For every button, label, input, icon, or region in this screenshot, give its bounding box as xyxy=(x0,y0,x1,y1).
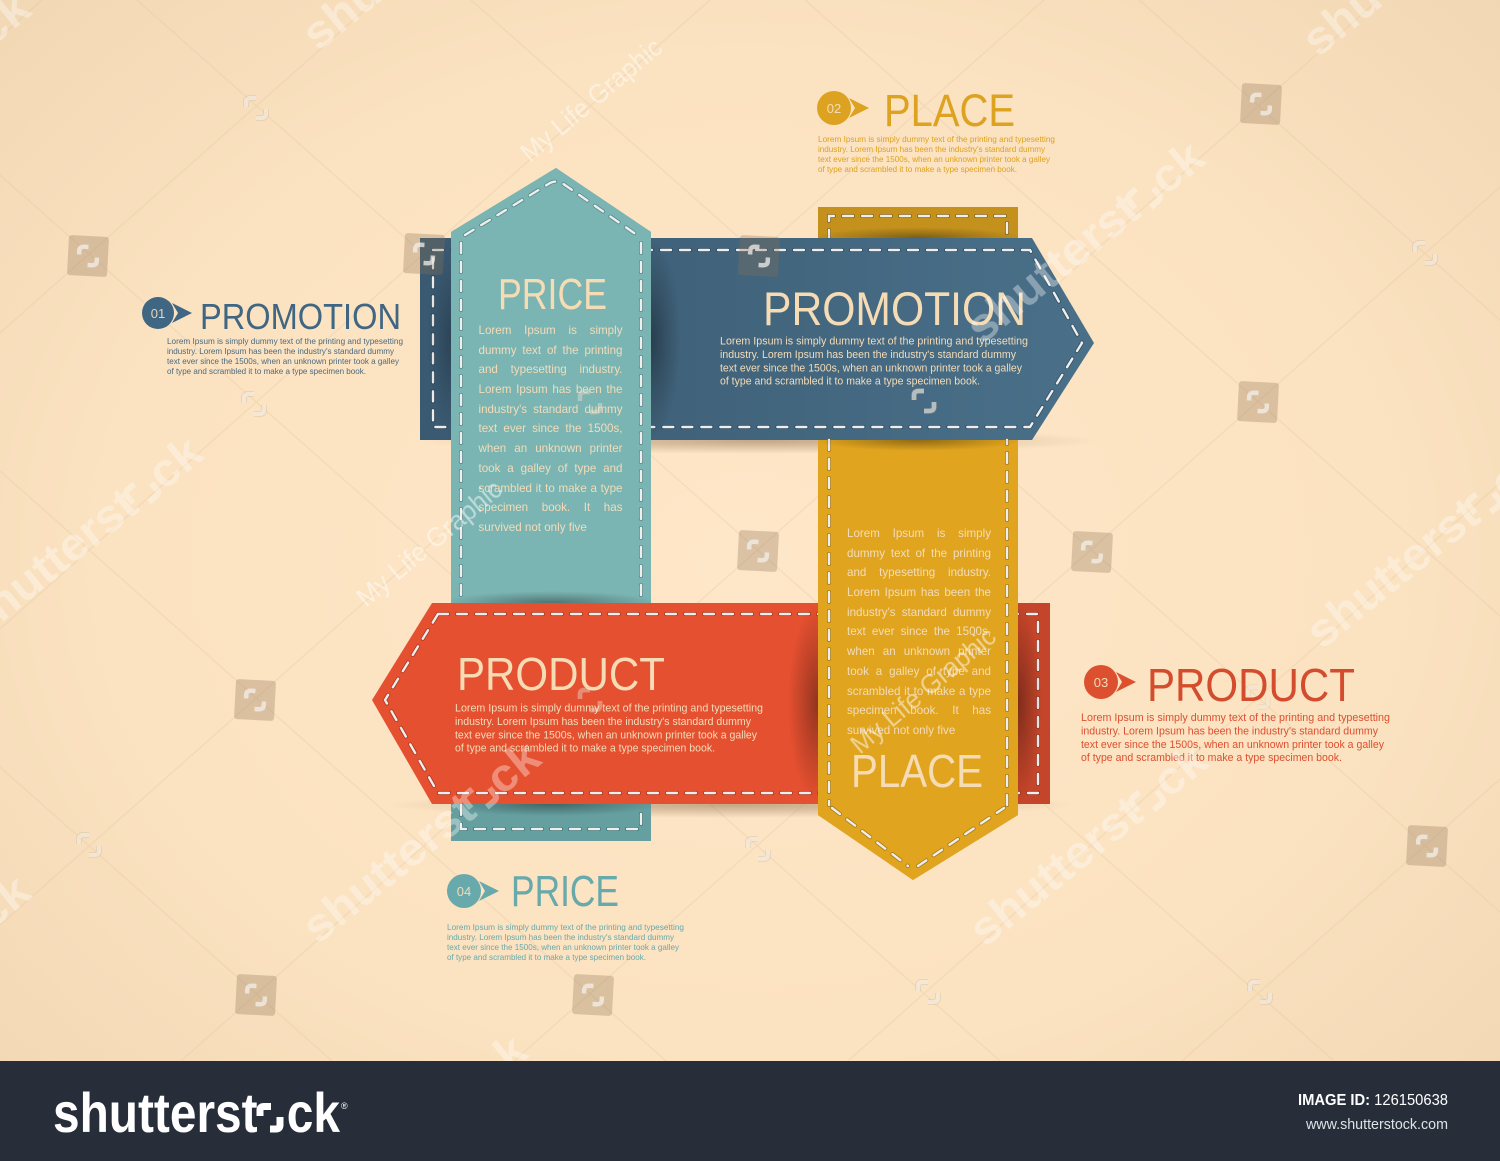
watermark: My Life Graphic text xyxy=(351,32,1002,760)
text block: legend product: industry. Lorem Ipsum has been the industry's standard dummy xyxy=(1081,726,1378,738)
heading: promotion: PROMOTION xyxy=(763,282,1026,335)
icon: badge 03 xyxy=(1084,665,1136,699)
text block: place ribbon: and typesetting industry. xyxy=(847,566,991,579)
ribbon: place, back layer xyxy=(818,207,1018,880)
watermark: My Life Graphic text: My Life Graphic xyxy=(515,32,668,168)
text block: product xyxy=(455,702,763,754)
text block: place ribbon: scrambled it to make a type xyxy=(847,684,991,698)
text block: price ribbon: survived not only five xyxy=(478,521,587,534)
text block: legend place: of type and scrambled it to make a type specimen book. xyxy=(818,164,1017,174)
text block: price ribbon xyxy=(478,324,622,534)
text block: price ribbon: when an unknown printer xyxy=(478,442,622,455)
text block: legend promotion: of type and scrambled it to make a type specimen book. xyxy=(167,366,366,376)
text block: place ribbon: dummy text of the printing xyxy=(847,547,991,560)
text block: price ribbon: took a galley of type and xyxy=(478,462,622,475)
text block: place ribbon: took a galley of type and xyxy=(847,665,991,678)
text block: legend product: of type and scrambled it to make a type specimen book. xyxy=(1081,752,1342,764)
text block: place ribbon: industry's standard dummy xyxy=(847,606,991,619)
text block: product: of type and scrambled it to make a type specimen book. xyxy=(455,742,715,754)
text block: legend promotion: industry. Lorem Ipsum has been the industry's standard dummy xyxy=(167,346,395,356)
text block: promotion xyxy=(720,336,1028,388)
text block: legend place: Lorem Ipsum is simply dummy text of the printing and typesetting xyxy=(818,134,1055,144)
legend 01: promotion xyxy=(142,296,403,376)
text block: place ribbon: survived not only five xyxy=(847,724,955,737)
text block: legend price: Lorem Ipsum is simply dummy text of the printing and typesetting xyxy=(447,922,684,932)
text block: price ribbon: specimen book. It has xyxy=(478,501,622,514)
text block: place ribbon: when an unknown printer xyxy=(847,645,991,658)
text block: product: Lorem Ipsum is simply dummy text of the printing and typesetting xyxy=(455,702,763,714)
text block: place ribbon xyxy=(847,527,991,737)
legend 03: product xyxy=(1081,659,1390,764)
text block: promotion: industry. Lorem Ipsum has been the industry's standard dummy xyxy=(720,349,1016,361)
watermark: My Life Graphic text: My Life Graphic xyxy=(351,474,508,613)
icon: badge 02: 02 xyxy=(827,101,841,116)
text block: legend product xyxy=(1081,712,1390,764)
watermark: shutterstock text: shutterstock xyxy=(956,130,1214,353)
text block: price ribbon: Lorem Ipsum is simply xyxy=(478,324,622,337)
text block: legend price: text ever since the 1500s, when an unknown printer took a galley xyxy=(447,942,680,952)
text block: promotion: of type and scrambled it to make a type specimen book. xyxy=(720,376,980,388)
ribbon: price, lower part xyxy=(441,168,661,841)
icon: badge 02 xyxy=(817,91,869,125)
heading: legend promotion: PROMOTION xyxy=(200,296,401,337)
icon: badge 04: 04 xyxy=(457,884,471,899)
heading: place: PLACE xyxy=(851,745,983,797)
text block: legend product: text ever since the 1500s, when an unknown printer took a galley xyxy=(1081,739,1384,751)
watermark: My Life Graphic text: My Life Graphic xyxy=(845,621,1002,760)
text block: product: industry. Lorem Ipsum has been the industry's standard dummy xyxy=(455,716,751,728)
watermark: square icons xyxy=(67,83,1448,1016)
text block: place ribbon: Lorem Ipsum is simply xyxy=(847,527,991,540)
text block: legend price: of type and scrambled it to make a type specimen book. xyxy=(447,952,646,962)
text block: product: text ever since the 1500s, when an unknown printer took a galley xyxy=(455,730,757,742)
text block: promotion: text ever since the 1500s, when an unknown printer took a galley xyxy=(720,362,1022,374)
text block: legend promotion: Lorem Ipsum is simply dummy text of the printing and typesetting xyxy=(167,336,403,346)
legend 02: place xyxy=(817,85,1055,174)
text block: place ribbon: text ever since the 1500s, xyxy=(847,625,991,638)
text block: legend price xyxy=(447,922,684,962)
heading: legend place: PLACE xyxy=(884,85,1015,136)
heading: product: PRODUCT xyxy=(457,648,665,700)
text block: legend product: Lorem Ipsum is simply dummy text of the printing and typesetting xyxy=(1081,712,1390,724)
ribbon: place, front layer xyxy=(813,429,1023,880)
text block: promotion: Lorem Ipsum is simply dummy text of the printing and typesetting xyxy=(720,336,1028,348)
icon: badge 01: 01 xyxy=(151,306,165,321)
ribbon: price, upper part xyxy=(451,168,651,603)
text block: legend price: industry. Lorem Ipsum has been the industry's standard dummy xyxy=(447,932,675,942)
text block: price ribbon: Lorem Ipsum has been the xyxy=(478,383,622,396)
text block: price ribbon: text ever since the 1500s, xyxy=(478,422,622,435)
registered mark: ® xyxy=(341,1101,348,1111)
ground shadows xyxy=(385,428,1100,818)
website: www.shutterstock.com xyxy=(1305,1117,1448,1133)
legend 04: price xyxy=(447,867,684,962)
image id: IMAGE ID: 126150638 xyxy=(1298,1092,1448,1109)
text block: place ribbon: specimen book. It has xyxy=(847,704,991,717)
heading: legend price: PRICE xyxy=(511,867,619,916)
heading: price: PRICE xyxy=(498,271,607,319)
icon: badge 04 xyxy=(447,874,499,908)
icon: badge 03: 03 xyxy=(1094,675,1108,690)
text block: price ribbon: and typesetting industry. xyxy=(478,363,622,376)
text block: price ribbon: industry's standard dummy xyxy=(478,403,622,416)
text block: price ribbon: dummy text of the printing xyxy=(478,344,622,357)
heading: legend product: PRODUCT xyxy=(1147,659,1355,711)
text block: place ribbon: Lorem Ipsum has been the xyxy=(847,586,991,599)
ribbon: promotion xyxy=(420,227,1094,440)
text block: price ribbon: scrambled it to make a type xyxy=(478,482,622,494)
ribbon: product xyxy=(372,603,1050,804)
text block: legend place: industry. Lorem Ipsum has been the industry's standard dummy xyxy=(818,144,1046,154)
text block: legend promotion: text ever since the 1500s, when an unknown printer took a galley xyxy=(167,356,400,366)
text block: legend place xyxy=(818,134,1055,174)
icon: badge 01 xyxy=(142,297,192,329)
text block: legend promotion xyxy=(167,336,403,376)
watermark: shutterstock text: shutterstock xyxy=(959,733,1217,956)
footer logo: shutterstock xyxy=(53,1081,341,1144)
watermark: shutterstock text: shutterstock xyxy=(292,730,550,953)
footer bar xyxy=(0,1061,1500,1161)
watermark: shutterstock text: k xyxy=(484,1023,536,1080)
text block: legend place: text ever since the 1500s, when an unknown printer took a galley xyxy=(818,154,1051,164)
